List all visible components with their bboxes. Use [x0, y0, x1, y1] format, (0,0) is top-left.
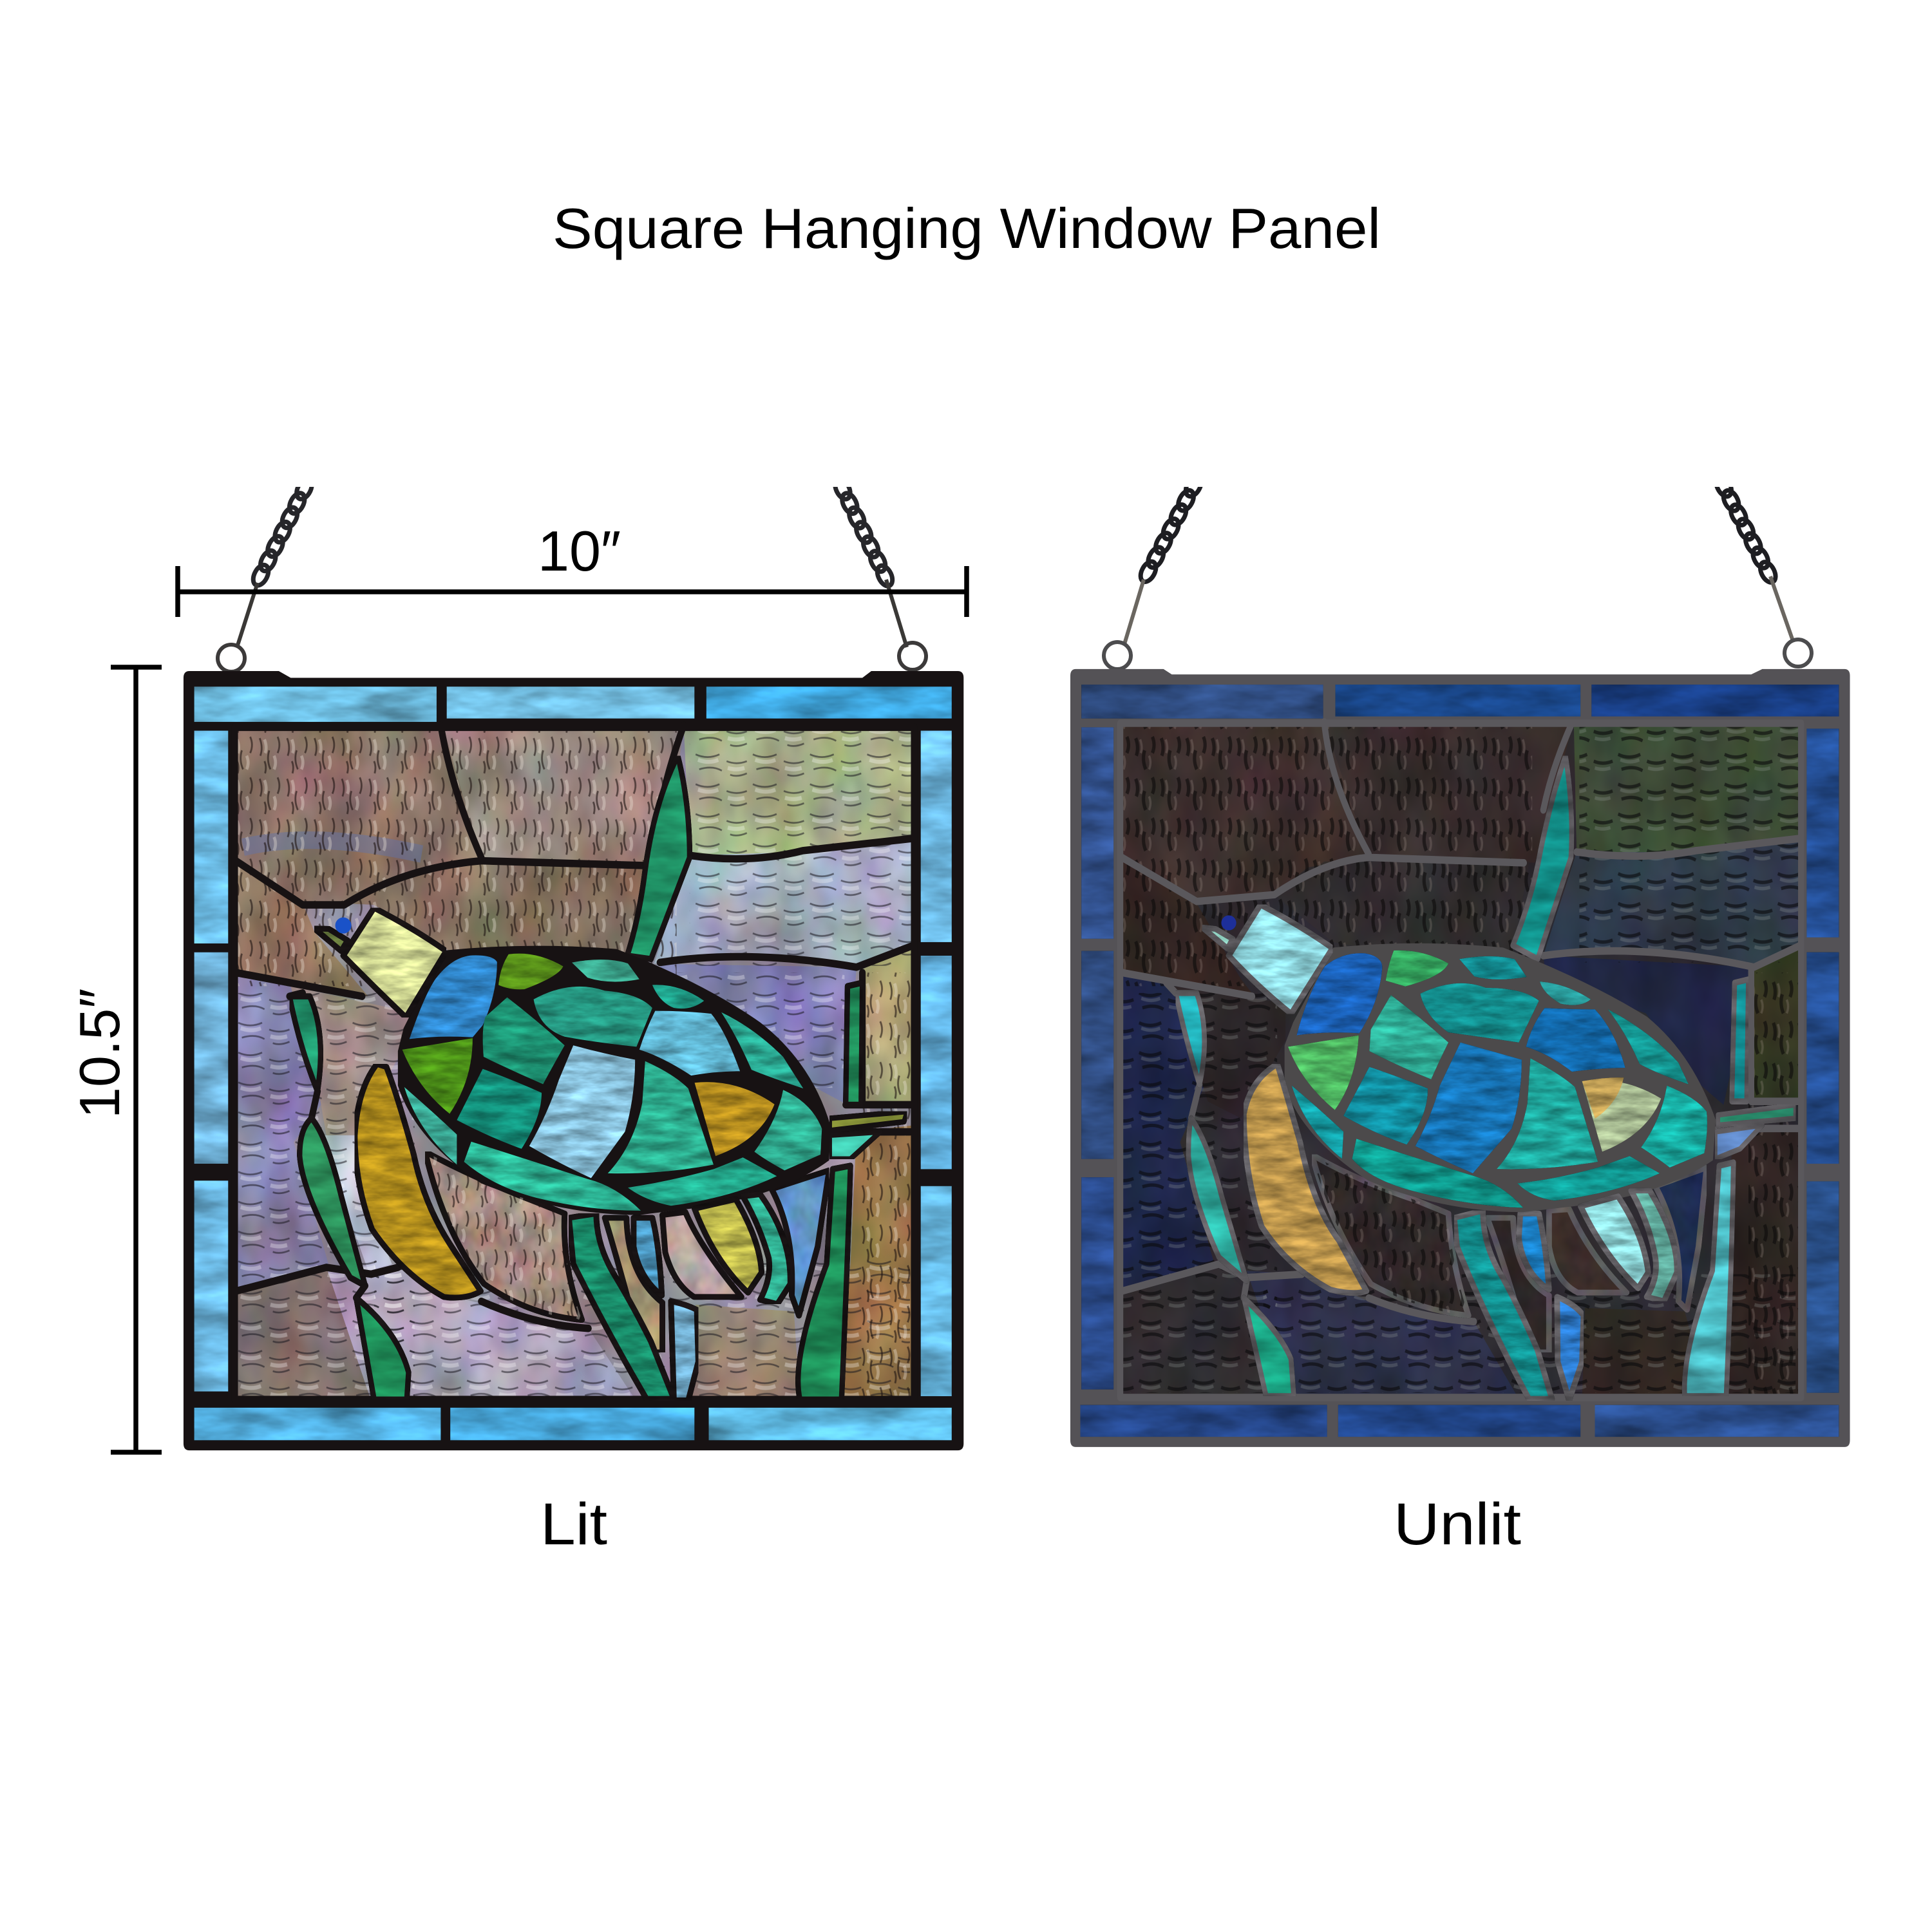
lit lower seaweed pieces [569, 1213, 698, 1401]
unlit ripple beneath turtle [1312, 1155, 1468, 1316]
unlit tail [1715, 1104, 1795, 1159]
panel: lit stained glass window [184, 671, 963, 1450]
unlit background lead lines [1120, 722, 1801, 1397]
height dimension line [111, 667, 162, 1452]
unlit lower seaweed pieces [1454, 1211, 1584, 1401]
unlit blue border glass [1080, 685, 1839, 1437]
lit glass beneath turtle [425, 1151, 829, 1352]
lit ripple beneath turtle [425, 1151, 582, 1320]
lit frame [184, 671, 963, 1450]
lit background lead lines [234, 725, 914, 1399]
lit turtle [314, 908, 831, 1401]
chains: lit panel [218, 476, 926, 672]
lit ripple texture [236, 728, 913, 1399]
lit turtle head [314, 908, 446, 1018]
lit blue streak in glass [243, 840, 422, 854]
lit blue border glass [194, 687, 952, 1440]
lit tail [829, 1112, 907, 1159]
lit flippers [355, 1064, 790, 1304]
lit background glass [234, 726, 915, 1401]
unlit flippers [1244, 1064, 1677, 1301]
chains: unlit panel [1104, 473, 1812, 669]
label: lit: Lit [540, 1492, 607, 1557]
lit turtle shell [402, 954, 822, 1211]
width label: 10″ [538, 519, 621, 583]
lit turtle eye [336, 918, 352, 934]
unlit shell lead backing [1285, 943, 1716, 1212]
unlit seaweed [1176, 756, 1748, 1396]
lit shell lead backing [398, 946, 831, 1215]
title: Square Hanging Window Panel [553, 196, 1381, 260]
unlit ripple texture [1122, 725, 1799, 1396]
unlit turtle shell [1288, 951, 1707, 1208]
panel: unlit stained glass window [1070, 669, 1850, 1447]
width dimension line [178, 566, 967, 617]
unlit panel structure [1070, 669, 1850, 1447]
height label: 10.5″ [68, 989, 131, 1119]
lit seaweed [290, 756, 862, 1399]
unlit turtle [1202, 905, 1716, 1401]
label: unlit: Unlit [1394, 1492, 1521, 1557]
lit panel structure [184, 671, 963, 1450]
unlit turtle eye [1221, 915, 1236, 931]
unlit glass beneath turtle [1312, 1155, 1707, 1352]
unlit background glass [1119, 722, 1803, 1398]
unlit turtle head [1202, 905, 1332, 1014]
unlit frame [1070, 669, 1850, 1447]
